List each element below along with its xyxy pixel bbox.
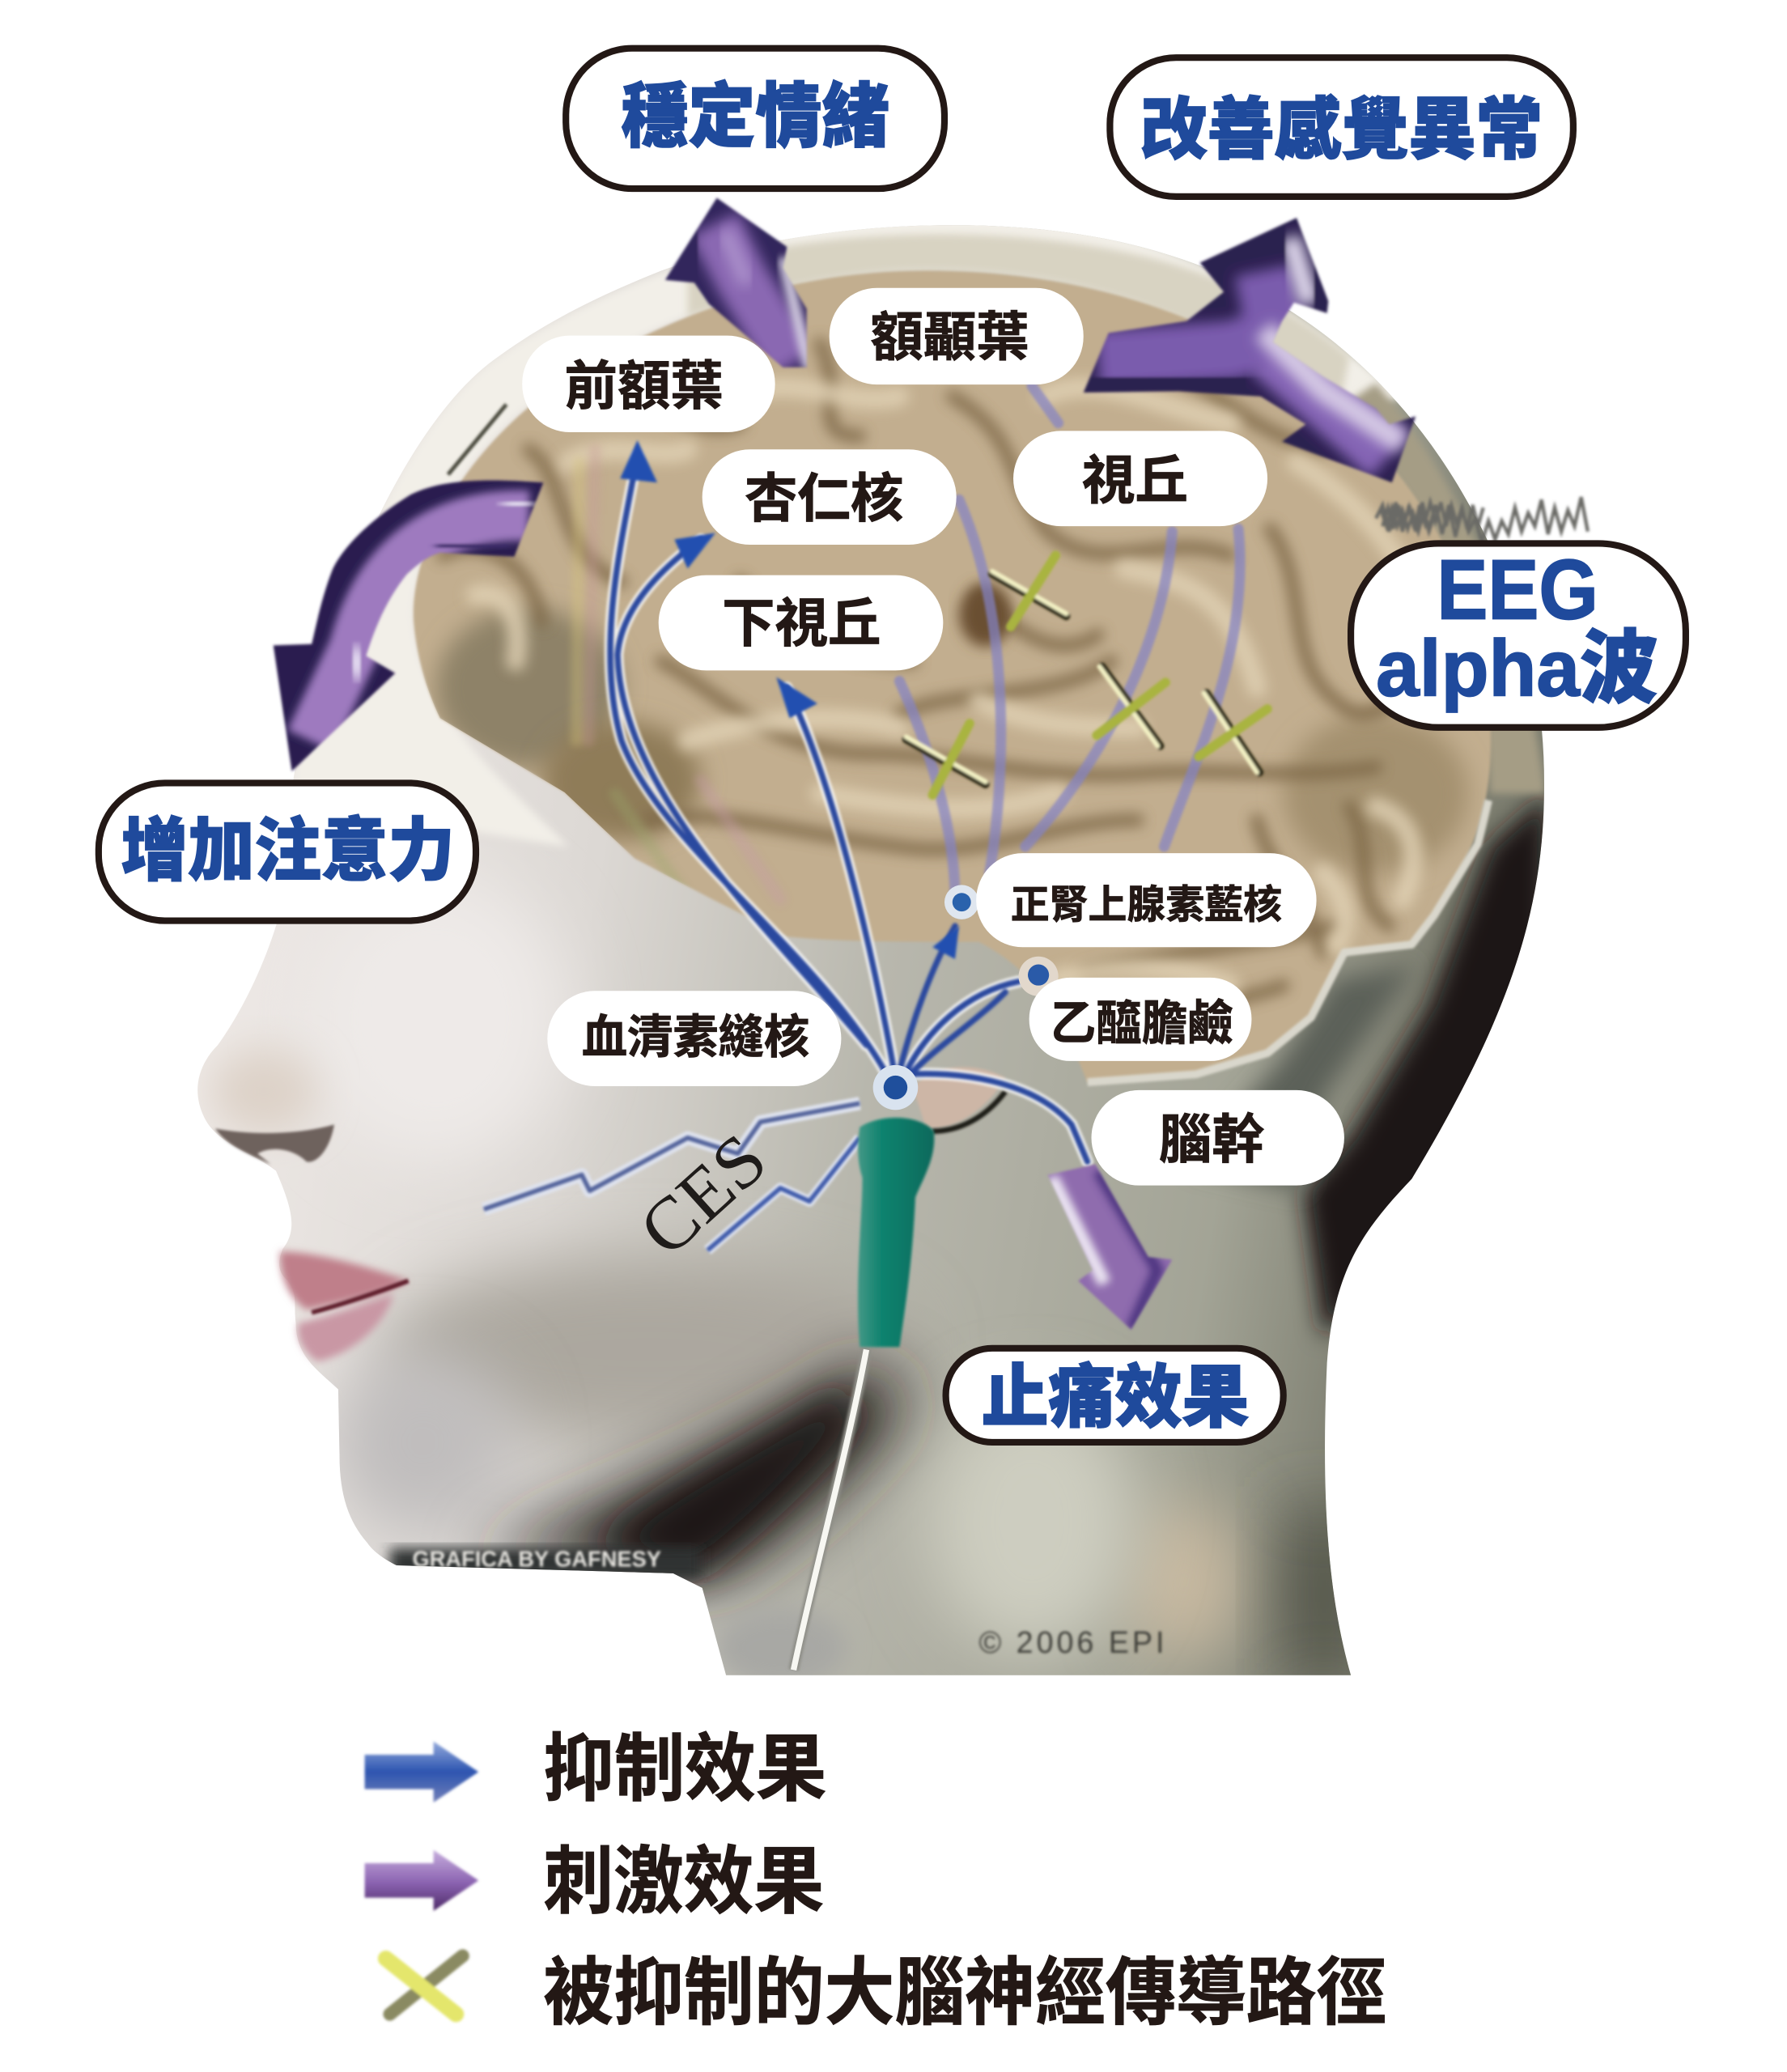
nostril: [215, 1124, 334, 1164]
label: raphe nuclei: 血清素縫核: [582, 1012, 809, 1064]
blocked pathway crosses: [906, 555, 1267, 795]
callout: EEG alpha: alpha波: [1376, 623, 1658, 712]
label: locus coeruleus: [976, 853, 1317, 947]
callout: increase attention: [99, 783, 476, 921]
head shading: [211, 210, 1548, 1688]
brain: [414, 270, 1491, 1132]
CES electrode and wire: [794, 1118, 934, 1670]
lips: [280, 1251, 409, 1361]
skull edge line: [448, 405, 507, 474]
label: prefrontal lobe: 前額葉: [565, 357, 724, 416]
CES label: CES: [623, 1117, 782, 1272]
brain folds: [436, 343, 1469, 1019]
cerebellum rim: [1088, 800, 1488, 1082]
legend icon: purple arrow: [365, 1850, 478, 1911]
label: raphe nuclei: [547, 991, 841, 1086]
CES lightning signal: [484, 1103, 860, 1250]
EEG waveform: [1376, 497, 1588, 542]
label: amygdala: [702, 449, 957, 545]
label: amygdala: 杏仁核: [745, 469, 903, 529]
callout: stabilize emotion: 穩定情緒: [622, 79, 889, 156]
nucleus nodes: [873, 885, 1059, 1110]
label: brainstem: 腦幹: [1159, 1110, 1265, 1169]
callout: analgesic effect: [946, 1348, 1284, 1442]
purple arrow: analgesia: [1047, 1163, 1173, 1331]
label: hypothalamus: [659, 575, 943, 670]
legend text: blocked pathway: 被抑制的大腦神經傳導路徑: [543, 1951, 1386, 2034]
label: hypothalamus: 下視丘: [722, 593, 881, 652]
legend icon: yellow cross: [386, 1956, 463, 2015]
purple arrow: sensory: [1082, 216, 1418, 484]
legend text: stimulation: 刺激效果: [543, 1841, 824, 1923]
copyright: © 2006 EPI: [978, 1625, 1164, 1659]
callout: improve sensory abnormality: 改善感覺異常: [1140, 91, 1543, 168]
label: thalamus: 視丘: [1082, 451, 1188, 510]
label: brainstem: [1092, 1090, 1344, 1186]
head silhouette: [197, 225, 1544, 1675]
purple arrow: attention: [272, 478, 545, 772]
legend: [365, 1728, 1386, 2034]
pale inhibited lines: [899, 386, 1240, 899]
legend text: inhibition: 抑制效果: [543, 1728, 826, 1811]
nerve arrowheads: [620, 440, 959, 959]
image credits: GRAFICA BY GAFNESY: [412, 1547, 661, 1572]
brainstem: [913, 1067, 1005, 1127]
label: thalamus: [1013, 431, 1267, 526]
nerve pathways: [610, 386, 1240, 1161]
label: acetylcholine: [1029, 978, 1251, 1061]
legend icon: blue arrow: [365, 1742, 478, 1802]
callout: stabilize emotion: [566, 49, 944, 189]
label: temporal lobe: [830, 288, 1084, 384]
callout: EEG alpha: EEG: [1437, 543, 1598, 638]
callout: EEG alpha: [1351, 543, 1686, 728]
head illustration: [197, 210, 1548, 1688]
purple arrow: emotion: [664, 196, 809, 369]
callout: analgesic effect: 止痛效果: [982, 1360, 1249, 1437]
callout: increase attention: 增加注意力: [121, 813, 455, 890]
label: prefrontal lobe: [522, 336, 775, 432]
brain mass: [414, 270, 1491, 1082]
label: temporal lobe: 額顳葉: [870, 308, 1029, 367]
label: acetylcholine: 乙醯膽鹼: [1051, 998, 1233, 1051]
label: locus coeruleus: 正腎上腺素藍核: [1011, 883, 1282, 927]
callout: improve sensory abnormality: [1110, 57, 1573, 197]
